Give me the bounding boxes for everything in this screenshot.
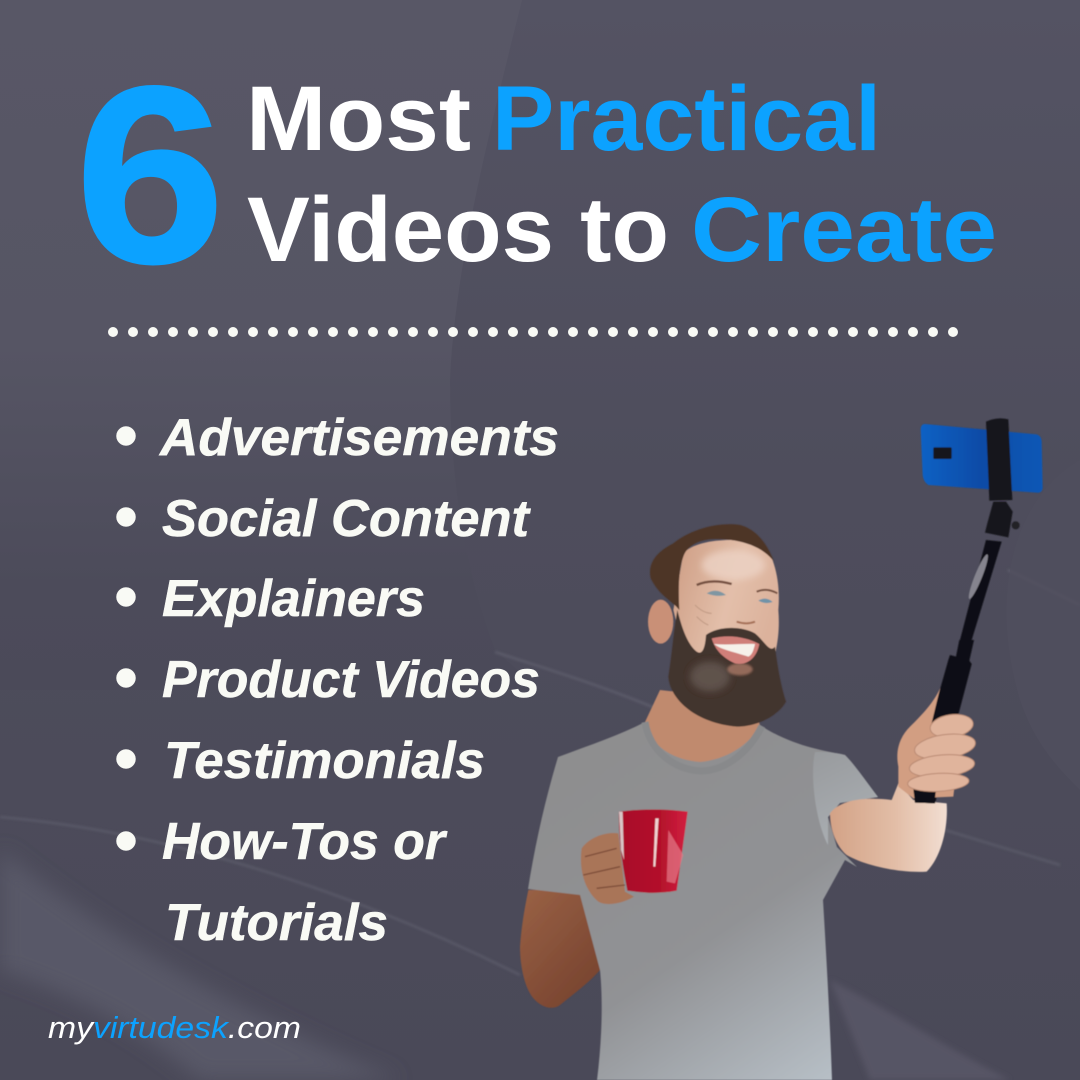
mug and holding hand — [581, 809, 688, 904]
heading: title: Practical — [492, 68, 881, 170]
item: How-Tos or Tutorials: Tutorials — [165, 894, 388, 952]
heading: title: Most — [246, 68, 471, 170]
collar — [645, 722, 762, 771]
left arm — [520, 888, 630, 1008]
mug highlights — [653, 818, 659, 867]
beard — [668, 610, 786, 727]
forehead highlight — [702, 550, 765, 580]
finger creases — [583, 848, 625, 888]
selfie stick head with phone — [921, 418, 1043, 640]
head — [648, 524, 786, 727]
bullet list — [116, 409, 559, 952]
phone — [921, 424, 1043, 493]
hand and stick handle — [830, 640, 977, 872]
upper shaft — [960, 540, 1002, 640]
item: Product Videos: Product Videos — [162, 651, 540, 709]
stick mount — [985, 502, 1013, 537]
palm — [897, 688, 960, 798]
phone camera — [933, 447, 952, 459]
eyes and brows — [695, 581, 777, 625]
outstretched forearm — [830, 783, 947, 872]
fingers — [907, 712, 977, 793]
photo: man with selfie stick and mug — [520, 418, 1043, 1080]
heading: title: Create — [691, 179, 997, 281]
item: How-Tos or Tutorials — [116, 813, 448, 952]
beard grey texture — [690, 662, 730, 692]
heading: title — [246, 68, 997, 281]
item: Testimonials: Testimonials — [164, 732, 485, 790]
item: How-Tos or Tutorials: How-Tos or — [162, 813, 448, 871]
stick handle — [912, 640, 974, 803]
mug body — [619, 809, 688, 893]
stick butt — [913, 789, 936, 803]
footer website: myvirtudesk .com — [48, 1010, 301, 1045]
item: Explainers: Explainers — [162, 570, 425, 628]
mount knob — [1012, 521, 1020, 529]
hair — [650, 524, 774, 610]
shaft gap — [966, 553, 991, 600]
face — [673, 540, 779, 680]
shirt sleeve fold — [813, 752, 878, 845]
gripping hand — [581, 833, 634, 904]
item: Advertisements: Advertisements — [158, 409, 559, 467]
dotted divider — [113, 327, 954, 337]
neck — [645, 690, 760, 762]
heading: big numeral 6: 6 — [75, 35, 225, 316]
ear — [648, 600, 673, 644]
shirt — [528, 722, 878, 1080]
lower lip chin — [727, 663, 753, 675]
mouth — [712, 636, 759, 664]
item: Social Content: Social Content — [162, 490, 532, 548]
heading: title: Videos to — [247, 179, 669, 281]
phone clamp — [986, 418, 1012, 501]
